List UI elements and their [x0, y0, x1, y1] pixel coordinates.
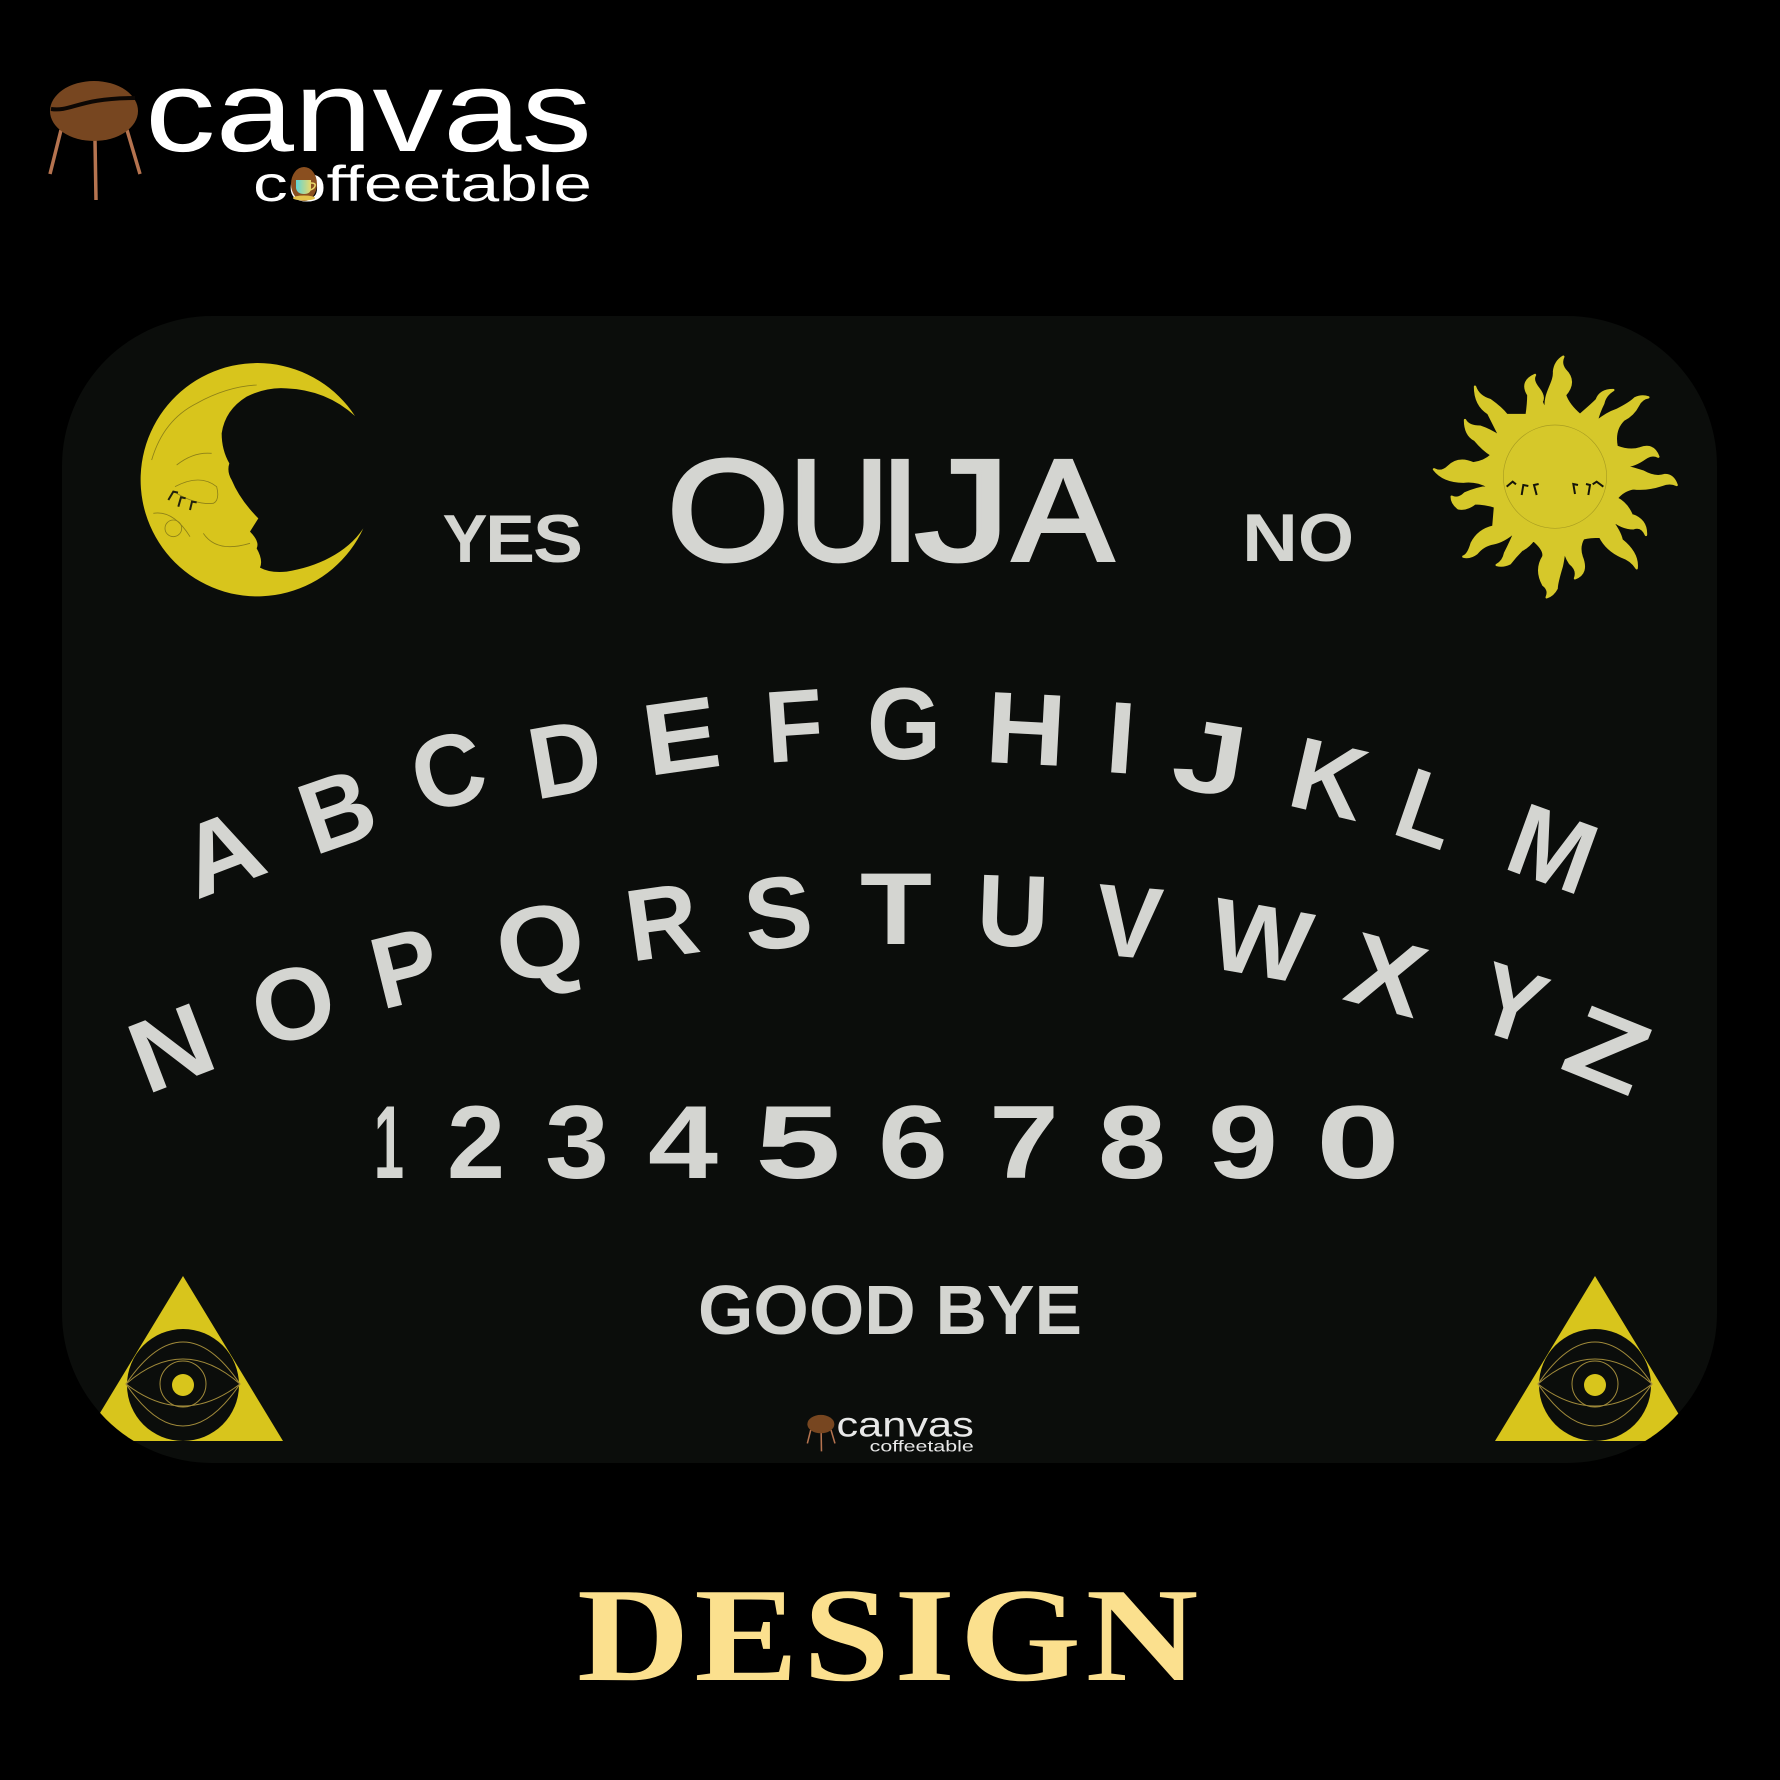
alphabet row: A to M: F	[761, 667, 827, 785]
alphabet row: A to M: H	[983, 670, 1069, 788]
alphabet row: A to M	[164, 667, 1612, 920]
label: YES: E	[485, 501, 535, 577]
alphabet row: A to M: L	[1383, 746, 1473, 872]
title: OUIJA: O	[667, 430, 789, 591]
number row: 1 to 0: 0	[1316, 1085, 1400, 1201]
number row: 1 to 0: 5	[755, 1085, 841, 1201]
alphabet row: A to M: K	[1280, 715, 1378, 843]
panel: ouija board	[62, 316, 1717, 1463]
alphabet row: N to Z: V	[1091, 862, 1167, 982]
number row: 1 to 0: 2	[447, 1085, 505, 1201]
alphabet row: N to Z: U	[975, 853, 1051, 969]
small logo on board: canvas	[837, 1404, 974, 1444]
icon: left eye triangle	[83, 1276, 283, 1441]
number row: 1 to 0: 3	[545, 1085, 609, 1201]
alphabet row: A to M: J	[1165, 696, 1254, 820]
number row: 1 to 0: 6	[878, 1085, 948, 1201]
number row: 1 to 0: 8	[1098, 1085, 1166, 1201]
small logo on board	[807, 1404, 974, 1456]
title: OUIJA: U	[789, 430, 889, 591]
title: OUIJA	[667, 430, 1113, 591]
alphabet row: A to M: A	[164, 785, 279, 920]
alphabet row: A to M: G	[867, 667, 941, 781]
number row: 1 to 0	[374, 1085, 1400, 1201]
number row: 1 to 0: 1	[374, 1085, 404, 1201]
label: NO	[1242, 500, 1354, 576]
alphabet row: N to Z: W	[1202, 876, 1321, 1006]
alphabet row: N to Z: S	[739, 853, 817, 973]
number row: 1 to 0: 7	[989, 1085, 1059, 1201]
alphabet row: A to M: M	[1494, 781, 1612, 917]
alphabet row: N to Z: O	[239, 938, 348, 1070]
label: NO: N	[1242, 500, 1298, 576]
alphabet row: A to M: B	[285, 745, 390, 877]
logo: canvas coffeetable	[50, 46, 592, 212]
alphabet row: N to Z: R	[619, 861, 706, 983]
label: NO: O	[1298, 500, 1354, 576]
small logo on board: coffeetable	[870, 1439, 974, 1456]
logo wordmark: canvas: canvas	[145, 46, 592, 176]
title: OUIJA: A	[1013, 430, 1113, 591]
title: OUIJA: I	[880, 430, 920, 591]
label: YES: S	[533, 501, 583, 577]
alphabet row: N to Z	[114, 852, 1666, 1118]
title: OUIJA: J	[915, 430, 1011, 591]
icon: coffee cup	[291, 167, 317, 201]
label: YES	[442, 501, 583, 577]
alphabet row: N to Z: Y	[1464, 940, 1560, 1068]
alphabet row: A to M: D	[520, 697, 611, 821]
alphabet row: A to M: I	[1103, 680, 1139, 796]
label: YES: Y	[442, 501, 488, 577]
alphabet row: N to Z: X	[1335, 910, 1438, 1040]
number row: 1 to 0: 4	[648, 1085, 718, 1201]
number row: 1 to 0: 9	[1208, 1085, 1278, 1201]
icon: sun	[1434, 357, 1677, 597]
alphabet row: A to M: C	[399, 707, 498, 835]
label: GOOD BYE: GOOD BYE	[698, 1271, 1082, 1349]
icon: crescent moon	[141, 363, 363, 596]
icon: coffee bean table	[50, 81, 140, 200]
logo wordmark: coffeetable: coffeetable	[253, 156, 592, 212]
alphabet row: N to Z: Z	[1549, 982, 1666, 1118]
alphabet row: N to Z: N	[114, 980, 229, 1115]
alphabet row: N to Z: Q	[487, 878, 593, 1006]
icon: right eye triangle	[1495, 1276, 1695, 1441]
heading: DESIGN: DESIGN	[577, 1561, 1203, 1709]
alphabet row: A to M: E	[636, 674, 727, 798]
alphabet row: N to Z: T	[860, 852, 932, 966]
alphabet row: N to Z: P	[359, 905, 451, 1031]
